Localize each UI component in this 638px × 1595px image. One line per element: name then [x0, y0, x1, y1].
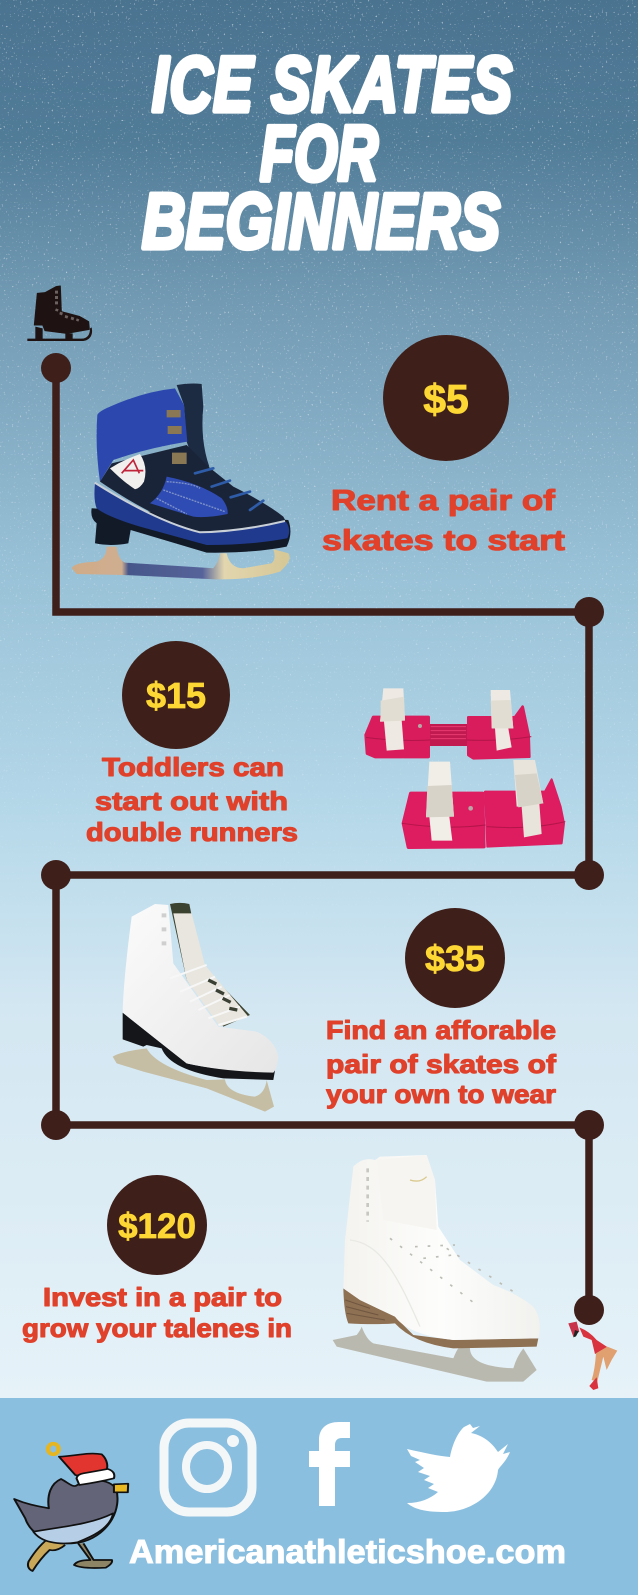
- icon: bird mascot: [14, 1444, 128, 1571]
- price: $35: [405, 908, 505, 1008]
- title: ICE SKATES: [152, 40, 513, 128]
- text: invest: grow your talenes in: [22, 1313, 292, 1343]
- image: double runners: [366, 688, 565, 847]
- price: $15: $15: [146, 675, 206, 716]
- icon: facebook: [309, 1422, 350, 1506]
- text: affordable: pair of skates of: [326, 1049, 556, 1079]
- price: $5: [383, 335, 509, 461]
- price: $120: $120: [118, 1207, 196, 1246]
- text: toddlers: Toddlers can: [102, 752, 284, 782]
- text: affordable: [326, 1015, 556, 1109]
- icon: twitter: [407, 1424, 510, 1512]
- icon: skater: [568, 1322, 617, 1390]
- price: $15: [122, 641, 230, 749]
- text: toddlers: [86, 752, 298, 847]
- text: toddlers: double runners: [86, 817, 298, 847]
- text: invest: [22, 1282, 292, 1343]
- website url: Americanathleticshoe.com: [129, 1533, 566, 1570]
- icon: instagram: [164, 1423, 252, 1512]
- price: $35: $35: [425, 938, 485, 979]
- title: BEGINNERS: [142, 177, 500, 265]
- title: FOR: [260, 109, 378, 197]
- image: blue skate: [72, 384, 290, 579]
- icon: small skate: [27, 286, 92, 341]
- title: [142, 40, 513, 265]
- text: toddlers: start out with: [95, 786, 288, 816]
- text: rent: skates to start: [322, 525, 565, 557]
- price: $120: [107, 1175, 207, 1275]
- image: white skate: [113, 903, 278, 1112]
- text: affordable: your own to wear: [326, 1079, 556, 1109]
- image: white skate premium: [333, 1155, 540, 1382]
- path connector: [41, 353, 604, 1325]
- text: invest: Invest in a pair to: [43, 1282, 282, 1312]
- text: rent: Rent a pair of: [331, 485, 555, 517]
- price: $5: $5: [423, 376, 469, 422]
- text: rent: [322, 485, 565, 557]
- text: affordable: Find an afforable: [326, 1015, 556, 1045]
- footer band: [0, 1398, 638, 1595]
